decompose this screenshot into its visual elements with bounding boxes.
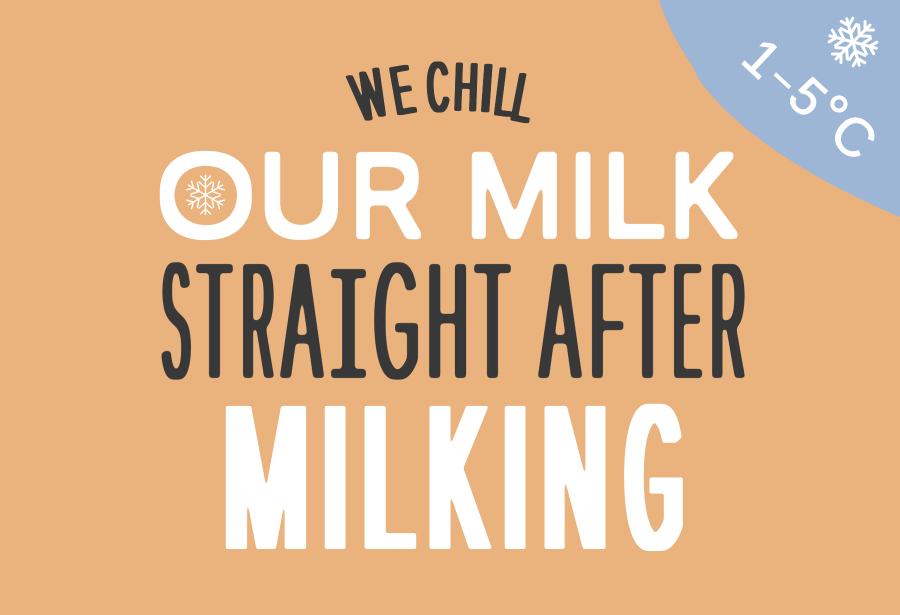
temperature label: C xyxy=(819,101,888,172)
heading line: straight after: I xyxy=(327,239,370,432)
heading line: our milk xyxy=(154,129,737,262)
heading line: milking: M xyxy=(224,361,308,594)
icon: corner snowflake xyxy=(823,12,883,72)
heading line: straight after: A xyxy=(282,226,322,417)
icon: snowflake inside the O xyxy=(185,175,226,215)
heading line: straight after: F xyxy=(591,225,623,416)
heading line: our milk: L xyxy=(601,130,666,261)
heading line: we chill: H xyxy=(453,48,479,127)
heading line: straight after: E xyxy=(674,226,701,417)
blue corner shape xyxy=(659,0,900,217)
heading line: straight after: G xyxy=(374,226,419,418)
heading line: our milk: O xyxy=(154,131,257,261)
heading line: straight after: R xyxy=(711,224,745,417)
temperature label: 1 xyxy=(731,28,792,90)
temperature label xyxy=(731,28,888,172)
heading line: we chill: L xyxy=(507,57,540,138)
heading line: we chill: I xyxy=(478,50,496,128)
heading line: our milk: U xyxy=(257,131,345,262)
temperature label: 5 xyxy=(777,67,838,129)
heading line: straight after: R xyxy=(242,225,274,417)
heading line: straight after: T xyxy=(476,225,509,416)
heading line: milking: L xyxy=(364,361,413,593)
temperature label: ° xyxy=(800,82,861,145)
heading line: straight after: T xyxy=(198,225,231,416)
heading line: we chill xyxy=(343,46,540,138)
heading line: milking: N xyxy=(544,361,606,593)
heading line: our milk: M xyxy=(464,131,565,262)
heading line: we chill: E xyxy=(386,51,419,131)
heading line: our milk: R xyxy=(350,131,424,262)
heading line: milking: I xyxy=(324,360,347,594)
heading line: straight after: A xyxy=(540,226,580,417)
heading line: we chill: L xyxy=(492,54,517,132)
heading line: straight after xyxy=(162,224,745,432)
temperature label: – xyxy=(764,59,804,99)
heading line: straight after: S xyxy=(162,226,190,417)
heading line: we chill: C xyxy=(426,46,450,128)
heading line: milking: G xyxy=(627,361,682,593)
heading line: straight after: H xyxy=(428,227,468,418)
heading line: milking: I xyxy=(504,360,527,594)
heading line: milking xyxy=(224,360,682,594)
heading line: we chill: W xyxy=(343,52,395,137)
heading line: our milk: K xyxy=(669,130,737,262)
heading line: milking: K xyxy=(429,361,487,593)
heading line: straight after: T xyxy=(631,225,664,416)
heading line: our milk: I xyxy=(567,129,599,261)
